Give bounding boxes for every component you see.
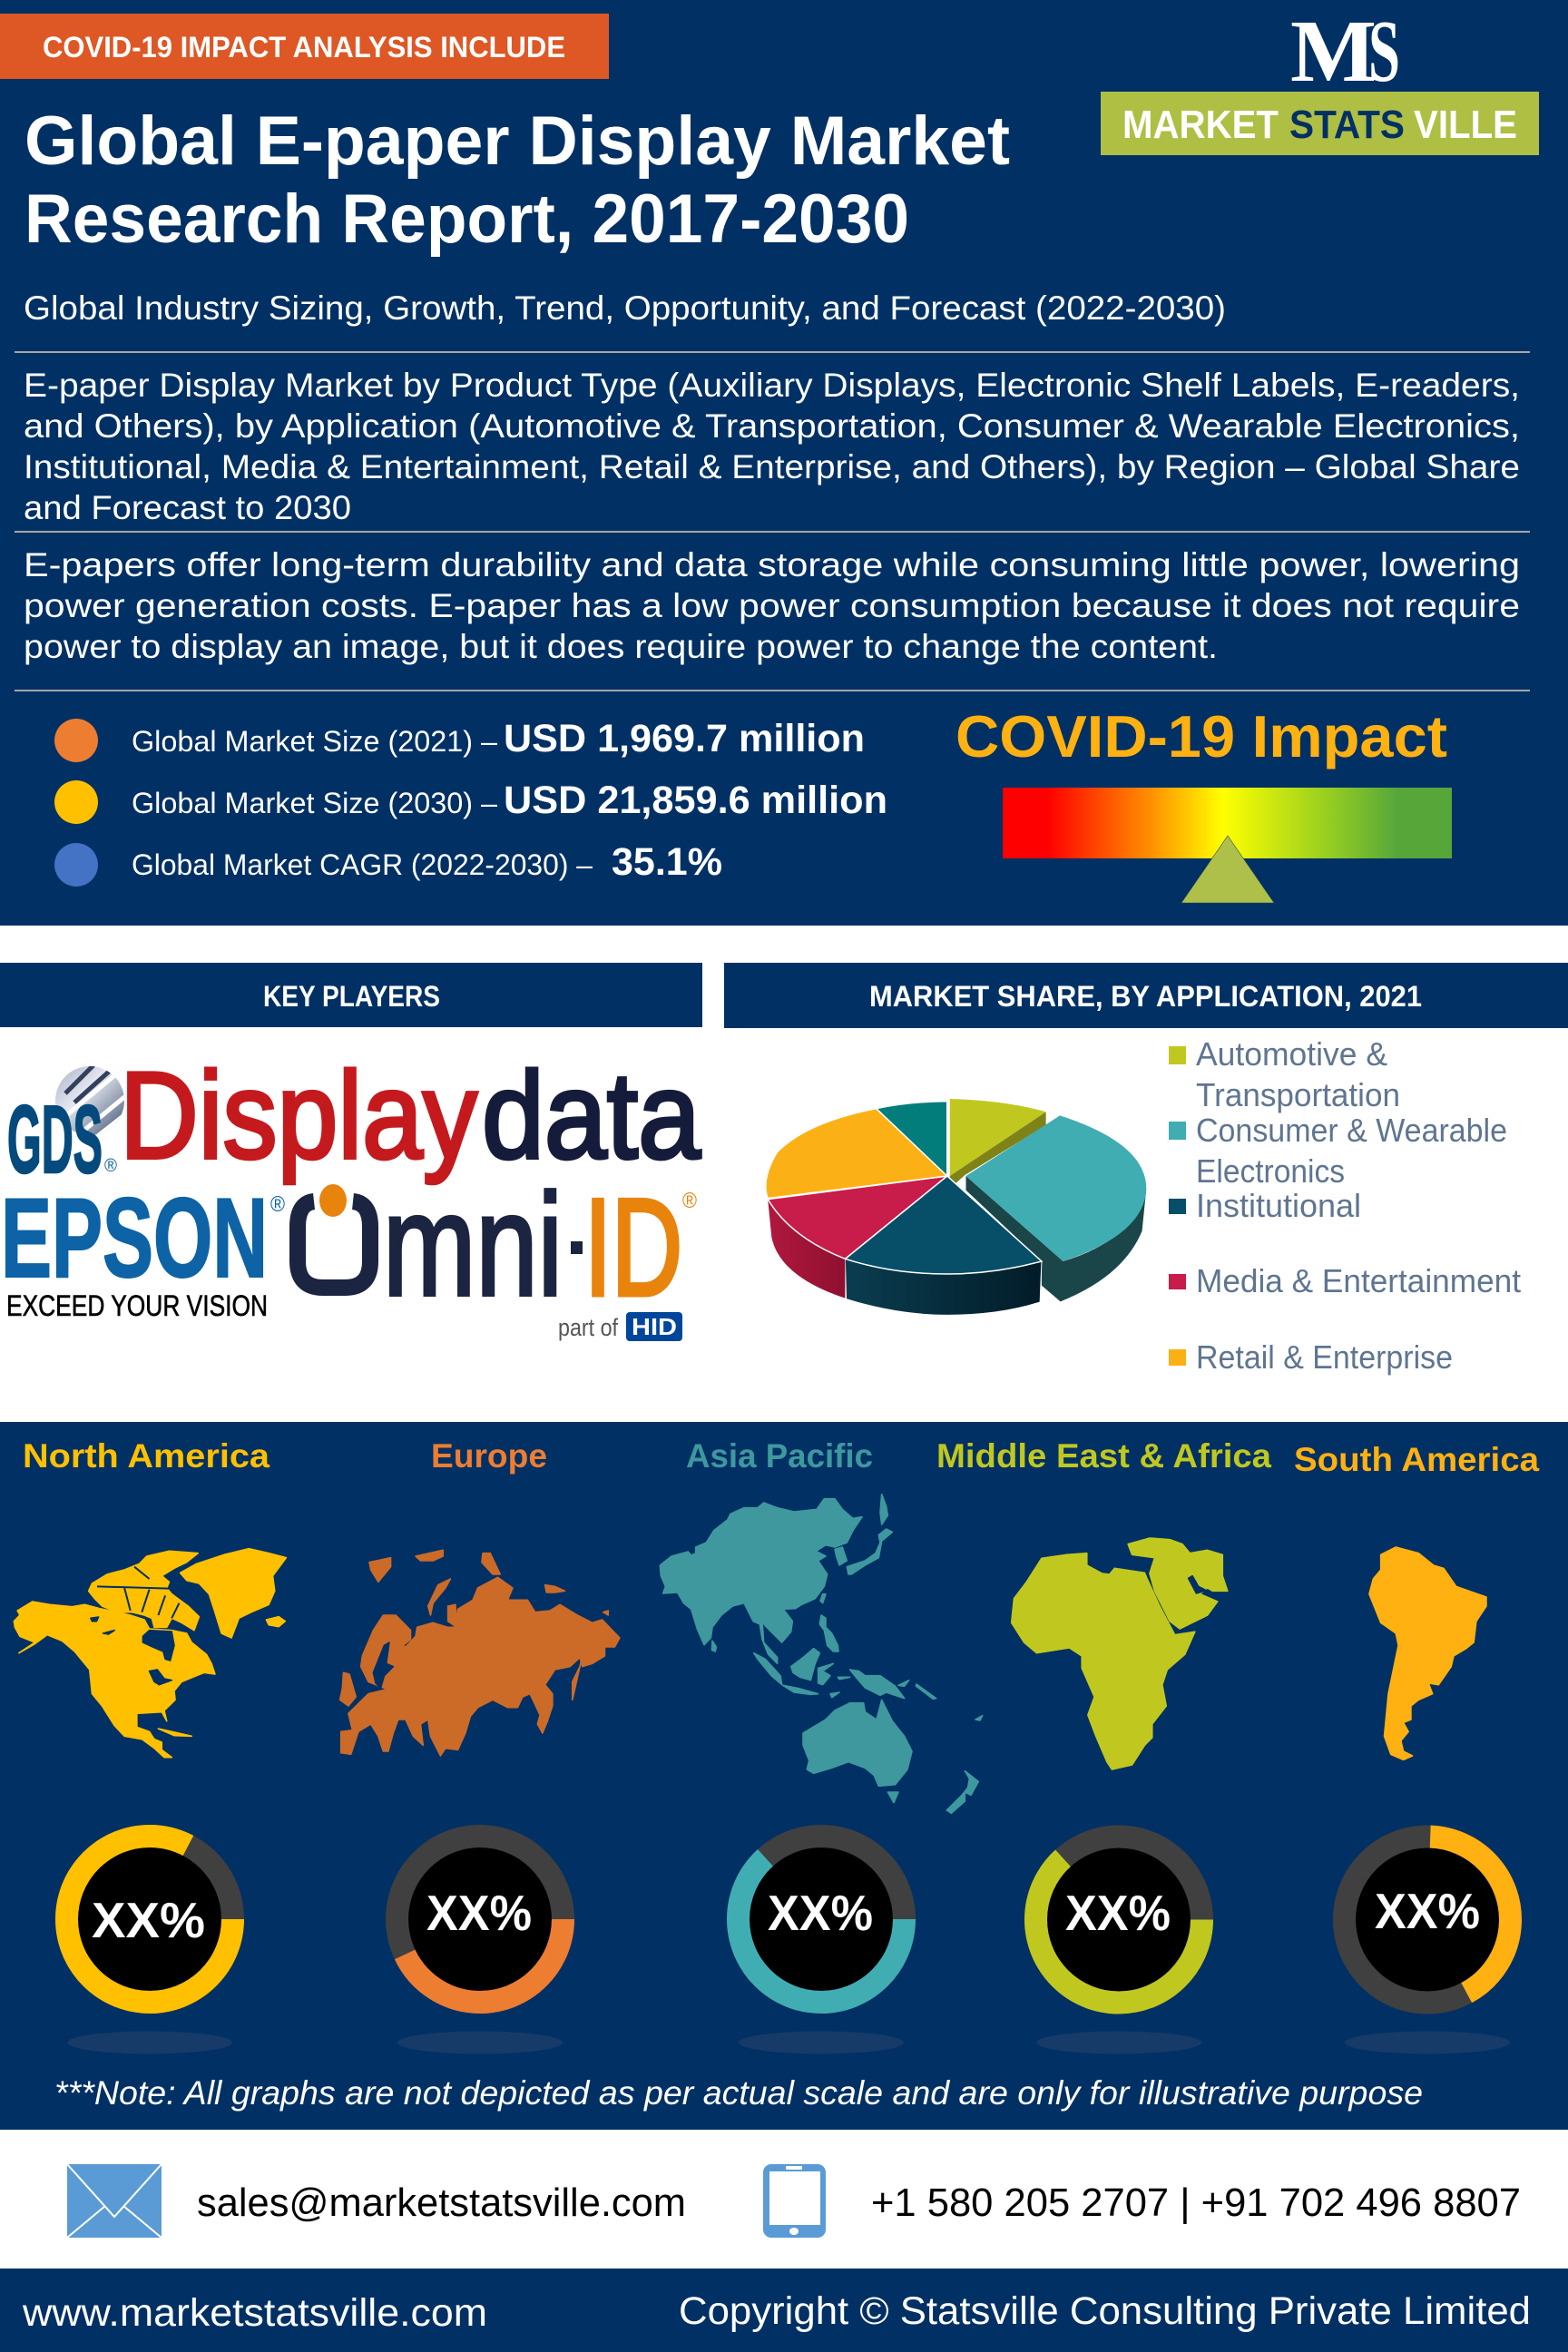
map: Middle East and Africa (1012, 1538, 1228, 1769)
donut: South America: XX% (1375, 1883, 1480, 1939)
logo: Epson (1, 1176, 285, 1322)
logo: Market Stats Ville (1101, 3, 1539, 155)
donut: North America: XX% (92, 1892, 205, 1948)
text block: description: power generation costs. E-paper has a low power consumption because it does not require (24, 587, 1520, 624)
text block: description: power to display an image, but it does require power to change the content. (24, 628, 1218, 665)
logo: Epson: EXCEED YOUR VISION (6, 1289, 268, 1322)
region heading: Asia Pacific: Asia Pacific (686, 1437, 873, 1475)
stats: CAGR: 35.1% (612, 840, 722, 884)
logo: GDS (8, 1066, 124, 1174)
title: Global E-paper Display Market (24, 103, 1010, 180)
title (24, 103, 1010, 258)
logo: Epson: ® (270, 1192, 285, 1217)
panel: regional section background (0, 1422, 1568, 2130)
legend: application categories: Institutional (1196, 1187, 1361, 1224)
logo: Omni-ID: mni (383, 1163, 563, 1326)
legend: application categories: Media & Entertainment (1196, 1262, 1521, 1299)
region heading: Middle East and Africa: Middle East & Africa (936, 1437, 1271, 1475)
chart: 3D pie, market share by application (766, 1099, 1146, 1315)
donut: South America (1341, 1834, 1514, 2054)
donut: Europe: XX% (426, 1885, 532, 1941)
stats: market size 2021: USD 1,969.7 million (504, 717, 865, 760)
gauge: COVID-19 impact: COVID-19 Impact (956, 703, 1447, 769)
contact: email: sales@marketstatsville.com (197, 2180, 686, 2225)
logo: GDS: GDS (7, 1086, 103, 1193)
text block: market segmentation (24, 367, 1520, 526)
logo: Market Stats Ville: MARKET (1122, 103, 1279, 147)
stats: CAGR (54, 840, 722, 887)
heading: key players: KEY PLAYERS (263, 980, 440, 1013)
region heading: North America: North America (23, 1437, 270, 1475)
text block: market segmentation: E-paper Display Market by Product Type (Auxiliary Displays, Electronic Shelf Labels, E-readers, (24, 367, 1520, 404)
donut: Europe (397, 1837, 563, 2054)
footer: copyright: Copyright © Statsville Consulting Private Limited (679, 2289, 1531, 2333)
footer: website: www.marketstatsville.com (22, 2291, 487, 2335)
logo: Omni-ID: part of (558, 1314, 618, 1341)
logo: Displaydata: Display (120, 1046, 477, 1184)
legend: application categories: Automotive & (1196, 1035, 1387, 1073)
heading: market share (724, 963, 1568, 1028)
legend: application categories: Retail & Enterprise (1196, 1338, 1453, 1376)
logo: GDS: ® (104, 1156, 117, 1176)
legend: application categories (1169, 1035, 1521, 1376)
donut: Asia Pacific: XX% (768, 1885, 873, 1941)
icon: envelope (67, 2164, 162, 2238)
map: South America (1369, 1547, 1486, 1759)
logo: Displaydata: data (482, 1046, 701, 1184)
logo: Market Stats Ville: VILLE (1414, 103, 1517, 147)
logo: Epson: EPSON (1, 1176, 268, 1301)
logo: Displaydata (120, 1046, 701, 1184)
text block: description (24, 546, 1520, 665)
map: Europe (340, 1550, 620, 1756)
text block: market segmentation: Institutional, Media & Entertainment, Retail & Enterprise, and Others), by Region – Global Share (24, 448, 1520, 485)
banner: COVID-19 impact (0, 14, 609, 79)
logo: Omni-ID: HID (632, 1313, 677, 1340)
stats: CAGR: Global Market CAGR (2022-2030) – (132, 848, 593, 881)
stats: market size 2021 (54, 717, 865, 762)
logo: Market Stats Ville: STATS (1289, 103, 1405, 147)
text block: market segmentation: and Forecast to 2030 (24, 489, 351, 526)
donut: Middle East and Africa: XX% (1065, 1885, 1171, 1941)
note: ***Note: All graphs are not depicted as per actual scale and are only for illustrative purpose (54, 2074, 1423, 2112)
donut: North America (67, 1837, 232, 2054)
region heading: Europe: Europe (431, 1437, 547, 1475)
text block: market segmentation: and Others), by Application (Automotive & Transportation, Consumer & Wearable Electronics, (24, 407, 1520, 445)
heading: key players (0, 963, 702, 1027)
text block: description: E-papers offer long-term durability and data storage while consuming little power, lowering (24, 546, 1520, 583)
stats: market size 2030: USD 21,859.6 million (504, 779, 887, 822)
donut: Middle East and Africa (1036, 1837, 1201, 2054)
map: North America (14, 1549, 286, 1758)
legend: application categories: Consumer & Wearable (1196, 1112, 1507, 1149)
subtitle: Global Industry Sizing, Growth, Trend, Opportunity, and Forecast (2022-2030) (24, 289, 1226, 327)
contact: phone numbers: +1 580 205 2707 | +91 702 496 8807 (871, 2180, 1521, 2225)
legend: application categories: Transportation (1196, 1076, 1400, 1113)
donut: Asia Pacific (739, 1837, 904, 2054)
logo: Omni-ID (298, 1163, 697, 1341)
icon: phone (763, 2164, 826, 2238)
stats: market size 2030 (54, 779, 887, 824)
region heading: South America: South America (1294, 1441, 1539, 1478)
panel: footer background (0, 2269, 1568, 2352)
stats: market size 2021: Global Market Size (2021) – (132, 725, 497, 758)
panel: header background (0, 0, 1568, 926)
stats: market size 2030: Global Market Size (2030) – (132, 787, 497, 819)
logo: Market Stats Ville: M (1290, 3, 1377, 101)
logo: Omni-ID: ® (682, 1189, 697, 1213)
heading: market share: MARKET SHARE, BY APPLICATION, 2021 (869, 980, 1422, 1013)
logo: Market Stats Ville: S (1368, 3, 1400, 101)
map: Asia Pacific (660, 1494, 983, 1813)
title: Research Report, 2017-2030 (24, 181, 909, 258)
legend: application categories: Electronics (1196, 1152, 1345, 1190)
gauge: COVID-19 impact (956, 703, 1452, 903)
logo: Omni-ID: ID (584, 1171, 682, 1325)
banner: COVID-19 impact: COVID-19 IMPACT ANALYSIS INCLUDE (43, 31, 565, 64)
